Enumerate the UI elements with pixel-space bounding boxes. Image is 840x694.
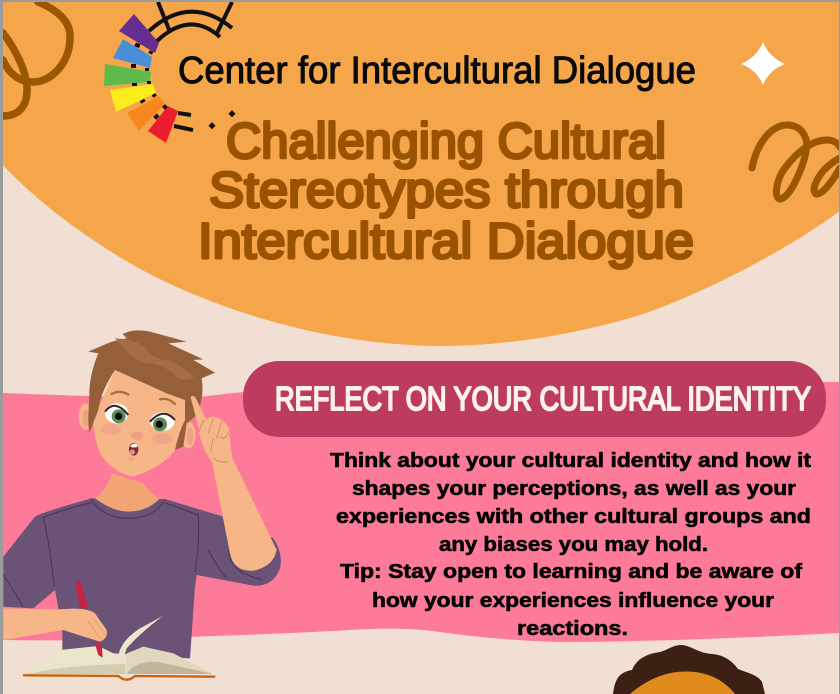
body text: [330, 450, 811, 640]
illustration: boy thinking with book: [3, 330, 281, 680]
pink band: [3, 382, 840, 642]
raised hand: [191, 396, 233, 464]
title: [198, 113, 694, 269]
cheeks: [101, 424, 172, 445]
body text: shapes your perceptions, as well as your: [352, 478, 796, 500]
left eye: [105, 403, 128, 423]
shirt seams: [3, 498, 262, 607]
logo rainbow segments: [104, 14, 178, 143]
illustration: next character head, cropped: [613, 645, 765, 694]
title: Intercultural Dialogue: [198, 213, 694, 269]
body text: any biases you may hold.: [439, 534, 708, 556]
pen tip: [94, 642, 103, 658]
hair highlight: [115, 338, 194, 380]
body text: experiences with other cultural groups and: [336, 506, 811, 528]
eyebrows: [112, 392, 175, 404]
icon: white sparkle star: [741, 42, 785, 85]
shirt: [3, 498, 281, 658]
logo wordmark: Center for Intercultural Dialogue: [178, 50, 696, 92]
hair: [88, 330, 215, 450]
pen upper part: [75, 582, 88, 608]
logo: Center for Intercultural Dialogue: [104, 2, 696, 143]
body text: Think about your cultural identity and how it: [330, 450, 811, 472]
body text: reactions.: [517, 618, 628, 640]
logo dots: [208, 110, 236, 129]
body text: Tip: Stay open to learning and be aware of: [340, 561, 802, 583]
body text: how your experiences influence your: [372, 590, 774, 612]
raised arm: [212, 460, 277, 571]
face: [93, 370, 186, 477]
decorative swirl: right: [752, 125, 840, 199]
right eye: [150, 412, 175, 431]
lower arm and hand: [3, 608, 107, 642]
title: Challenging Cultural: [226, 113, 666, 169]
ears: [79, 403, 196, 448]
title: Stereotypes through: [209, 162, 684, 218]
open book: [24, 616, 214, 680]
decorative swirl: top left: [3, 2, 70, 116]
mouth: [128, 443, 138, 460]
neck: [95, 473, 159, 512]
nose: [131, 432, 143, 440]
orange header shape: [3, 2, 840, 346]
section heading pill: [243, 361, 826, 437]
logo arcs: [149, 2, 232, 130]
